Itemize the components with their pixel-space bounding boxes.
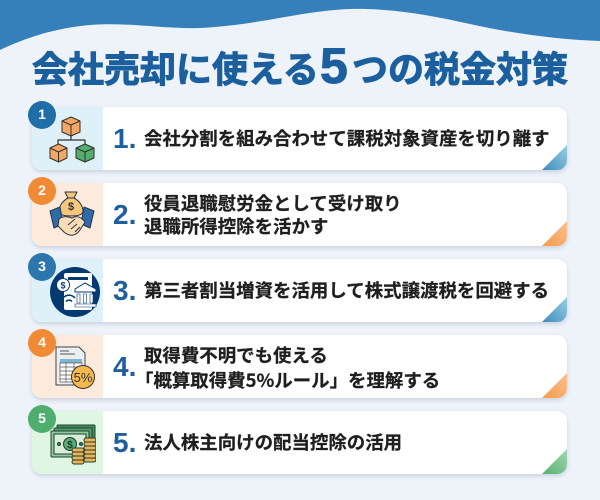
icon: bank on phone: $ — [60, 280, 66, 290]
number 4: 4. — [113, 351, 136, 382]
title: 会社売却に使える — [32, 41, 319, 93]
text 2: 退職所得控除を活かす — [144, 213, 328, 239]
badge 2: 2 — [38, 182, 46, 198]
badge 4 — [28, 329, 56, 357]
number 5: 5. — [113, 427, 136, 458]
text 1: 会社分割を組み合わせて課税対象資産を切り離す — [144, 125, 550, 151]
text 2: 役員退職慰労金として受け取り — [144, 190, 402, 216]
badge 3: 3 — [38, 258, 46, 274]
panel: card 1 — [32, 107, 567, 170]
number 3: 3. — [113, 275, 136, 306]
number 2: 2. — [113, 199, 136, 230]
icon: money bag and handshake — [50, 192, 94, 236]
icon: document 5 percent — [56, 346, 95, 389]
title: つの税金対策 — [352, 41, 568, 93]
icon: banknotes and coins: $ — [67, 440, 73, 451]
badge 2 — [28, 177, 56, 205]
icon: bank on phone — [50, 267, 100, 317]
badge 3 — [28, 253, 56, 281]
text 3: 第三者割当増資を活用して株式譲渡税を回避する — [144, 277, 549, 303]
text 4: 「概算取得費5%ルール」を理解する — [135, 367, 440, 393]
badge 1: 1 — [38, 106, 46, 122]
title: 5 — [320, 38, 348, 94]
text 2 — [144, 190, 402, 239]
icon: boxes — [50, 116, 94, 162]
text 4 — [135, 342, 440, 393]
text 5: 法人株主向けの配当控除の活用 — [144, 429, 402, 455]
badge 5 — [28, 405, 56, 433]
panel: card 2 — [32, 183, 567, 246]
badge 5: 5 — [38, 410, 46, 426]
icon: document 5 percent: 5% — [74, 370, 93, 385]
panel: card 3 — [32, 259, 567, 322]
panel: card 4 — [32, 335, 567, 398]
icon: banknotes and coins — [50, 424, 96, 464]
badge 1 — [28, 101, 56, 129]
header wave — [0, 0, 600, 50]
text 4: 取得費不明でも使える — [144, 342, 328, 368]
icon: money bag and handshake: $ — [68, 201, 74, 213]
badge 4: 4 — [38, 334, 46, 350]
title — [32, 38, 568, 94]
panel: card 5 — [32, 411, 567, 474]
number 1: 1. — [113, 123, 136, 154]
